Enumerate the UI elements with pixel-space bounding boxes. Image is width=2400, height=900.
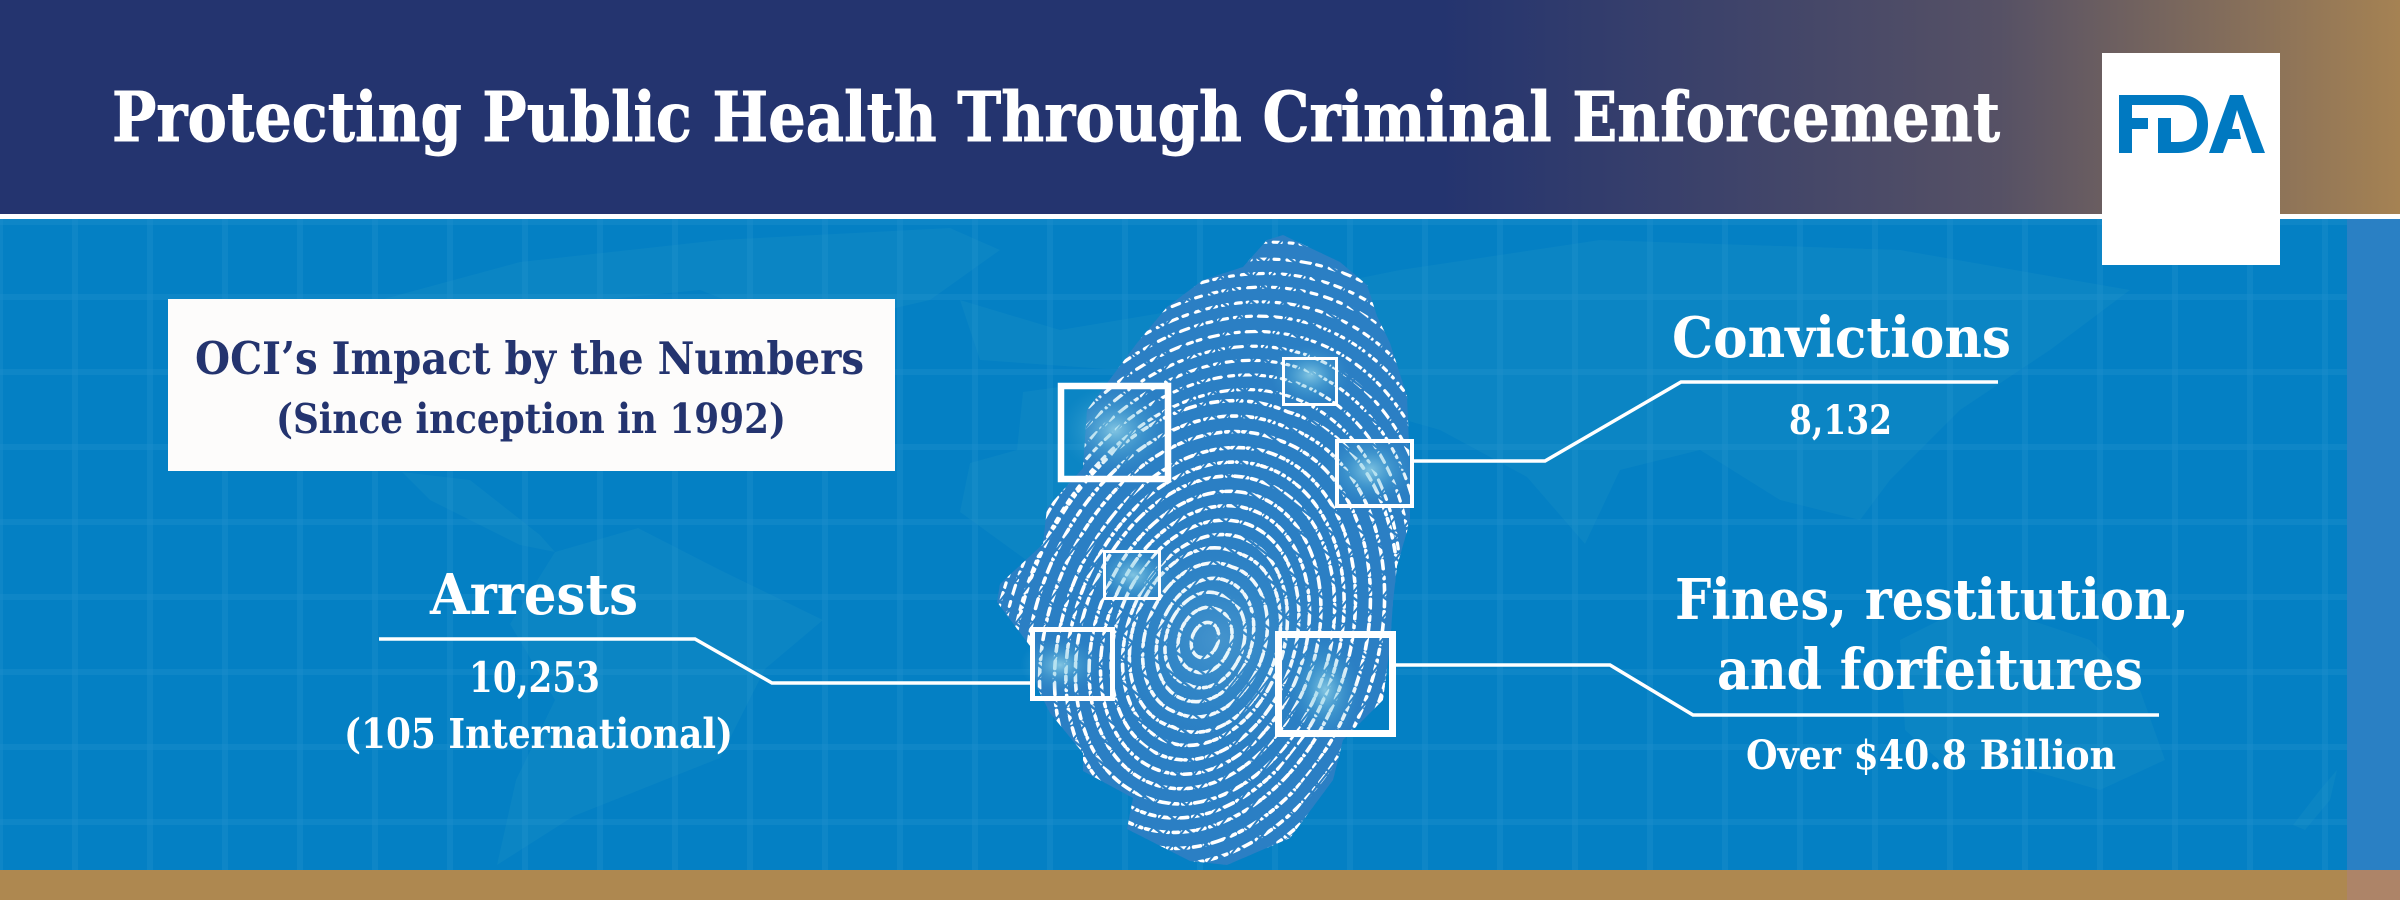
icon: FD letters bbox=[2119, 95, 2208, 153]
fingerprint ridge breaks bbox=[990, 230, 1415, 870]
fingerprint blob bbox=[997, 235, 1410, 865]
title: Protecting Public Health Through Criminal Enforcement bbox=[112, 78, 2001, 158]
background panel bbox=[0, 219, 2400, 870]
detail box: convictions bbox=[1337, 441, 1412, 506]
subheading text: (Since inception in 1992) bbox=[276, 395, 786, 443]
bottom tan band bbox=[0, 870, 2400, 900]
detail box: fines bbox=[1278, 634, 1392, 734]
connector: fines bbox=[1396, 665, 2159, 715]
fingerprint glow bbox=[1020, 345, 1415, 750]
map: australia bbox=[1900, 610, 2165, 790]
arrests label: Arrests bbox=[429, 562, 638, 628]
fingerprint bbox=[997, 235, 1410, 865]
heading box: OCI's impact bbox=[168, 299, 895, 471]
header divider bbox=[0, 214, 2400, 219]
convictions value: 8,132 bbox=[1789, 397, 1892, 444]
fines label line 1: Fines, restitution, bbox=[1675, 567, 2189, 633]
detail box: upper middle bbox=[1284, 358, 1336, 404]
world map bbox=[380, 228, 2337, 865]
connector: arrests bbox=[379, 639, 1030, 683]
stat: convictions bbox=[1672, 305, 2011, 444]
header band bbox=[0, 0, 2400, 214]
convictions label: Convictions bbox=[1672, 305, 2011, 371]
map: new zealand bbox=[2293, 770, 2337, 830]
arrests value: 10,253 bbox=[469, 653, 600, 702]
map: africa and europe bbox=[960, 380, 1400, 800]
detail box: arrests bbox=[1032, 630, 1112, 698]
right side strip bbox=[2347, 219, 2400, 870]
detail box: upper left bbox=[1061, 386, 1168, 479]
arrests international value: (105 International) bbox=[344, 710, 733, 758]
stat: fines bbox=[1675, 567, 2189, 779]
map: north america bbox=[380, 228, 1000, 552]
FDA logo bbox=[2102, 53, 2280, 265]
map: south america bbox=[497, 528, 823, 865]
icon: A letter bbox=[2209, 95, 2265, 153]
detail box: middle left bbox=[1104, 552, 1160, 598]
stat: arrests bbox=[344, 562, 733, 758]
fingerprint ridges bbox=[998, 240, 1410, 862]
fines value: Over $40.8 Billion bbox=[1746, 732, 2116, 779]
fines label line 2: and forfeitures bbox=[1717, 637, 2143, 703]
heading text: OCI’s Impact by the Numbers bbox=[195, 332, 864, 385]
connector: convictions bbox=[1414, 382, 1998, 461]
